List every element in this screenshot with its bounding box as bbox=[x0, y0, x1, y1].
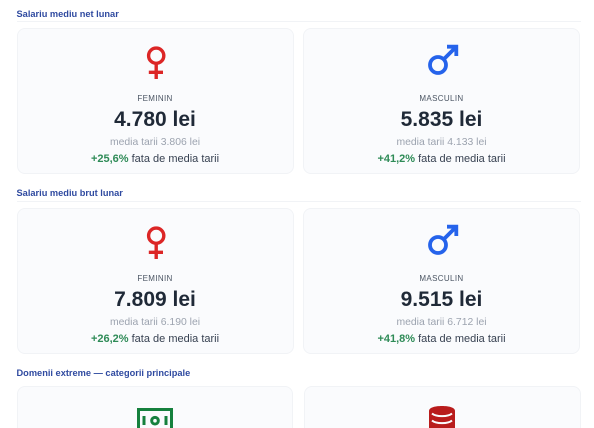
value: gross male: 9.515 lei bbox=[401, 288, 482, 310]
heading: gross salary: Salariu mediu brut lunar bbox=[16, 188, 123, 198]
icon: banknote bbox=[137, 408, 173, 428]
panel: gross salary female bbox=[16, 208, 294, 354]
heading: extreme domains: Domenii extreme — categorii principale bbox=[16, 368, 190, 378]
panel: lowest domain bbox=[304, 386, 580, 428]
text: difference: +41,8% fata de media tarii bbox=[377, 333, 506, 345]
text: country average: media tarii 3.806 lei bbox=[110, 137, 200, 148]
panel: net salary male bbox=[303, 28, 580, 174]
text: difference: +25,6% fata de media tarii bbox=[91, 153, 219, 165]
icon: male symbol bbox=[428, 224, 458, 255]
icon: database stack bbox=[429, 406, 455, 428]
text: difference: +26,2% fata de media tarii bbox=[91, 333, 219, 345]
panel: net salary female bbox=[16, 28, 294, 174]
text: country average: media tarii 4.133 lei bbox=[396, 137, 487, 148]
panel: highest domain bbox=[16, 386, 292, 428]
text: country average: media tarii 6.712 lei bbox=[396, 317, 487, 328]
icon: female symbol bbox=[146, 46, 166, 79]
icon: female symbol bbox=[146, 226, 166, 259]
value: net female: 4.780 lei bbox=[114, 108, 196, 130]
text: country average: media tarii 6.190 lei bbox=[110, 317, 200, 328]
panel: gross salary male bbox=[303, 208, 580, 354]
label: masculin: MASCULIN bbox=[419, 94, 464, 103]
value: net male: 5.835 lei bbox=[401, 108, 482, 130]
icon: male symbol bbox=[428, 44, 458, 75]
value: gross female: 7.809 lei bbox=[114, 288, 196, 310]
label: feminin: FEMININ bbox=[137, 94, 173, 103]
heading: net salary: Salariu mediu net lunar bbox=[16, 9, 119, 19]
text: difference: +41,2% fata de media tarii bbox=[377, 153, 506, 165]
label: masculin: MASCULIN bbox=[419, 274, 464, 283]
label: feminin: FEMININ bbox=[137, 274, 173, 283]
